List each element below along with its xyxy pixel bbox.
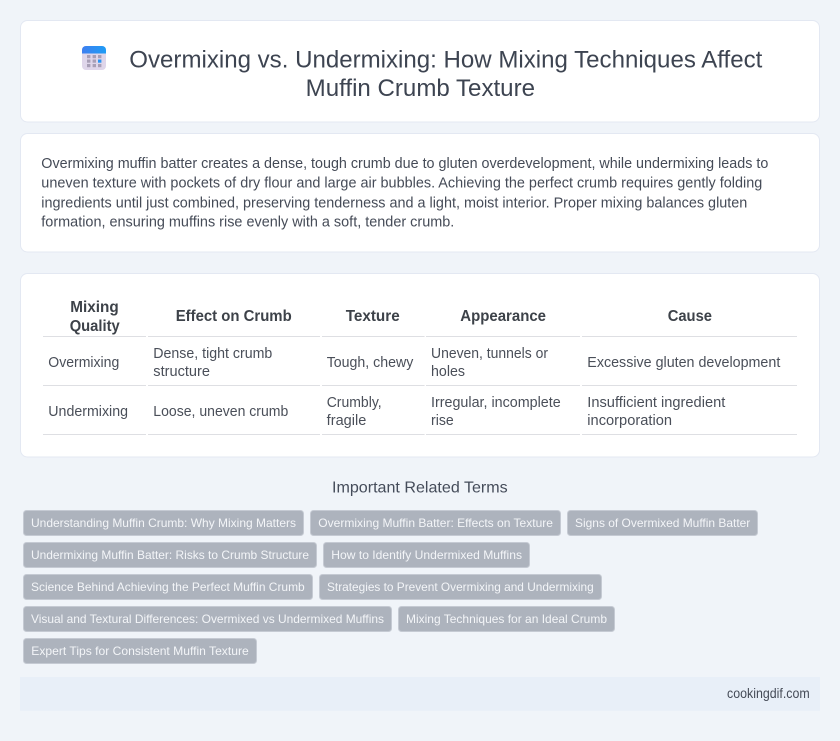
related terms tags: Visual and Textural Differences: Overmixed vs Undermixed Muffins <box>31 612 384 626</box>
table row: undermixing: Irregular, incomplete <box>431 395 561 411</box>
related terms tags: Mixing Techniques for an Ideal Crumb <box>406 612 607 626</box>
table header row: Appearance <box>460 308 546 325</box>
table row: undermixing: Loose, uneven crumb <box>153 404 288 420</box>
table row: undermixing: fragile <box>327 413 366 429</box>
table row: overmixing: Dense, tight crumb <box>153 346 272 362</box>
title <box>129 46 763 102</box>
panel: header <box>20 20 820 122</box>
related terms tags: How to Identify Undermixed Muffins <box>331 548 522 562</box>
panel: comparison table <box>20 274 820 457</box>
related terms tags: Undermixing Muffin Batter: Risks to Crumb Structure <box>31 548 309 562</box>
intro text block: Overmixing muffin batter creates a dense, tough crumb due to gluten overdevelopment, while undermixing leads to <box>41 156 768 172</box>
table row: undermixing: Undermixing <box>48 404 128 420</box>
related terms tags <box>24 510 758 664</box>
intro text block: uneven texture with pockets of dry flour and large air bubbles. Achieving the perfect crumb requires gently folding <box>41 176 762 192</box>
table header row: Mixing <box>70 299 119 316</box>
table row: overmixing: holes <box>431 364 465 380</box>
intro text block: formation, ensuring muffins rise evenly with a soft, tender crumb. <box>41 215 454 231</box>
related terms tags: Signs of Overmixed Muffin Batter <box>575 516 750 530</box>
icon: calendar <box>82 46 106 70</box>
related terms tags: Strategies to Prevent Overmixing and Undermixing <box>327 580 594 594</box>
table row: overmixing: Tough, chewy <box>327 355 414 371</box>
intro text block <box>41 156 768 231</box>
table row: overmixing: Overmixing <box>48 355 119 371</box>
panel: introduction <box>20 134 820 252</box>
related terms tags: Understanding Muffin Crumb: Why Mixing Matters <box>31 516 296 530</box>
table header row: Cause <box>668 308 712 325</box>
table row: undermixing: rise <box>431 413 454 429</box>
table row: overmixing: Excessive gluten development <box>587 355 780 371</box>
table row: undermixing: Insufficient ingredient <box>587 395 725 411</box>
title: Muffin Crumb Texture <box>306 75 535 102</box>
table header row: Quality <box>70 318 120 335</box>
table header row <box>43 299 797 337</box>
table row: overmixing <box>43 346 797 386</box>
related terms tags: Overmixing Muffin Batter: Effects on Texture <box>318 516 553 530</box>
related terms tags: Science Behind Achieving the Perfect Muffin Crumb <box>31 580 305 594</box>
title: Overmixing vs. Undermixing: How Mixing Techniques Affect <box>129 46 763 74</box>
table row: overmixing: Uneven, tunnels or <box>431 346 548 362</box>
related terms tags: Expert Tips for Consistent Muffin Texture <box>31 644 249 658</box>
intro text block: ingredients until just combined, preserving tenderness and a light, moist interior. Proper mixing balances gluten <box>41 195 747 211</box>
footer: cookingdif.com <box>727 686 810 701</box>
table row: undermixing <box>43 395 797 435</box>
table header row: Effect on Crumb <box>176 308 292 325</box>
table row: undermixing: Crumbly, <box>327 395 382 411</box>
table row: undermixing: incorporation <box>587 413 672 429</box>
heading: important related terms: Important Related Terms <box>332 480 508 497</box>
footer <box>20 677 820 711</box>
table header row: Texture <box>346 308 400 325</box>
table row: overmixing: structure <box>153 364 210 380</box>
